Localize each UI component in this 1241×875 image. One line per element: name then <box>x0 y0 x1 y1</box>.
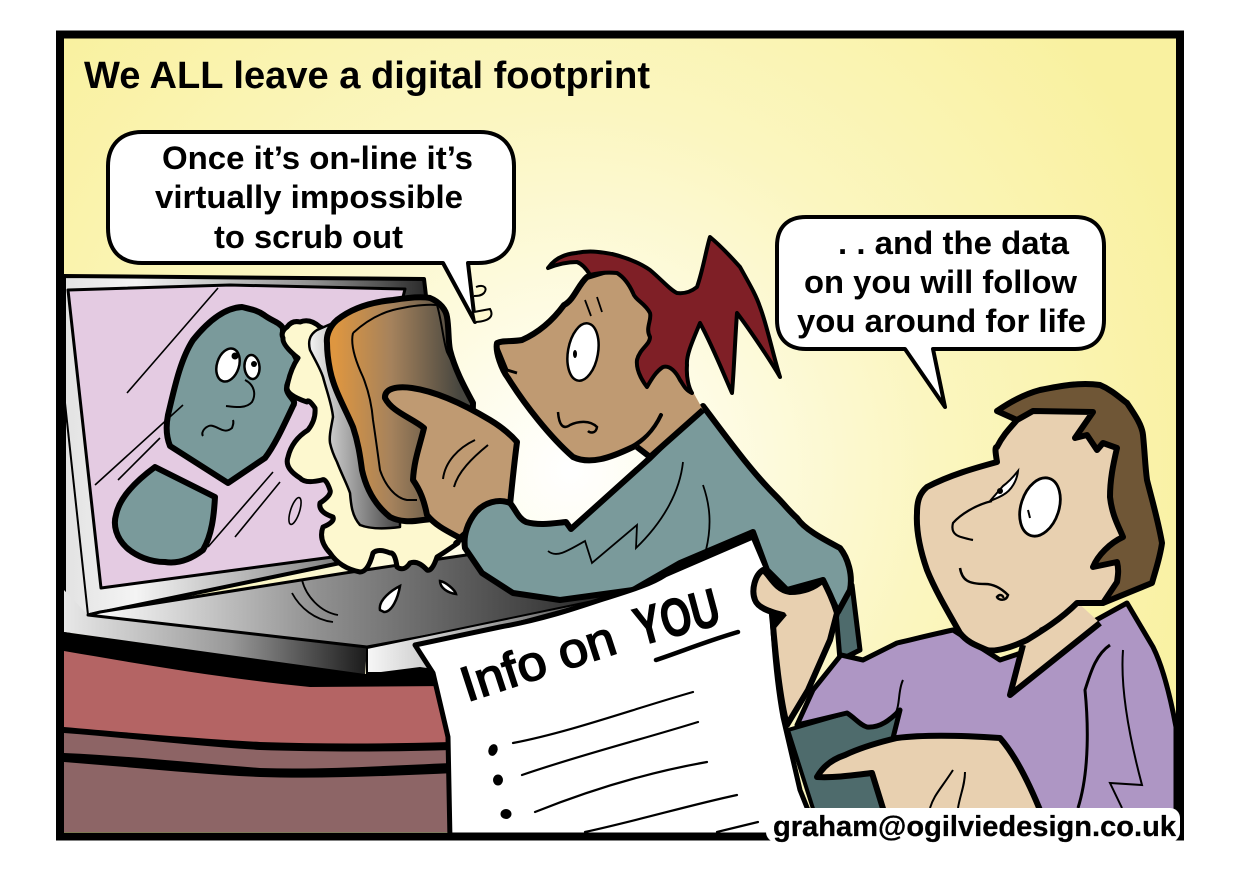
man's pants <box>788 716 896 808</box>
speech bubble: data follows you: . . and the data <box>838 224 1070 261</box>
keyboard drip marks <box>380 581 456 612</box>
screen face: teal shoulder blob <box>115 467 215 562</box>
man's hand holding paper <box>753 570 837 725</box>
speech bubble: data follows you <box>777 217 1104 407</box>
laptop <box>64 276 625 675</box>
paper sheet <box>415 537 820 840</box>
knuckle lines <box>443 440 488 487</box>
comic scene <box>64 237 1176 840</box>
girl's hand wiping <box>385 387 517 538</box>
speech bubble: wiping remark: to scrub out <box>214 218 403 255</box>
grey cloth edge <box>309 320 400 528</box>
speech bubble: wiping remark: virtually impossible <box>155 178 463 215</box>
girl's sleeve and torso <box>465 406 860 660</box>
speech bubble: data follows you: on you will follow <box>804 263 1078 300</box>
girl's red hair <box>548 237 780 393</box>
man's neck <box>1010 600 1100 695</box>
man's purple shirt <box>797 603 1176 815</box>
speech bubble: wiping remark <box>108 132 514 322</box>
paper heading: YOU: YOU <box>628 577 726 658</box>
man's pointing hand <box>817 736 1042 815</box>
man's head <box>917 411 1123 651</box>
credit label: graham@ogilviedesign.co.uk <box>773 811 1177 843</box>
paper heading: Info on: Info on <box>454 612 623 712</box>
brown sponge <box>327 297 473 521</box>
speech bubble: data follows you: you around for life <box>797 302 1086 339</box>
man's hair <box>997 384 1162 603</box>
title: We ALL leave a digital footprint <box>84 55 650 97</box>
girl's head <box>497 270 703 460</box>
cream foam <box>282 321 470 572</box>
speech bubble: wiping remark: Once it’s on-line it’s <box>162 139 473 176</box>
paper underline <box>656 632 738 660</box>
paper bullet dots <box>487 743 512 819</box>
wipe streak lines <box>95 288 304 547</box>
desk <box>64 632 460 832</box>
puff marks by bubble tail <box>474 286 491 322</box>
screen face: teal blob <box>167 307 297 483</box>
paper list lines <box>513 692 758 832</box>
